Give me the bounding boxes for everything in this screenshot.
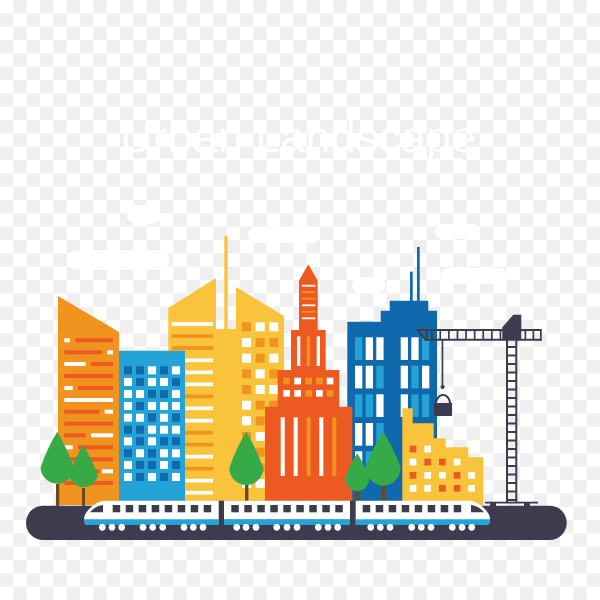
building: blue tower right — [347, 247, 437, 501]
tree 2 — [69, 445, 98, 506]
ground road — [26, 506, 567, 540]
tree 1 — [40, 432, 74, 506]
train — [84, 501, 490, 531]
building: small yellow stepped block — [402, 408, 483, 505]
tree 4 — [345, 453, 369, 501]
train car 3 — [356, 501, 490, 531]
crane jib — [415, 329, 542, 341]
yellow tower bars — [172, 322, 213, 494]
crane hook and load — [434, 340, 452, 416]
grid windows — [124, 366, 180, 481]
crane mast — [485, 340, 538, 506]
trees — [40, 432, 401, 506]
train car 1 — [84, 501, 219, 531]
tree 5 — [366, 432, 401, 501]
spire stripes — [302, 285, 315, 319]
building: yellow twin tower — [168, 236, 284, 505]
orange tower window bars — [64, 338, 113, 485]
title: Urban Landscape: Urban Landscape — [120, 113, 476, 162]
tree 3 — [229, 432, 263, 501]
lower windows — [283, 378, 333, 397]
train car 2 — [224, 501, 350, 531]
building: light blue grid tower — [119, 351, 185, 505]
crane cab — [502, 315, 521, 340]
building: orange slanted tower — [58, 296, 119, 505]
crane — [415, 315, 542, 506]
tower windows — [355, 337, 429, 474]
building: red stepped skyscraper — [265, 264, 352, 503]
base stripes — [281, 417, 336, 476]
block windows — [410, 446, 475, 492]
mid stripes — [297, 336, 320, 366]
clouds — [67, 205, 507, 293]
yellow tower windows — [242, 322, 278, 488]
